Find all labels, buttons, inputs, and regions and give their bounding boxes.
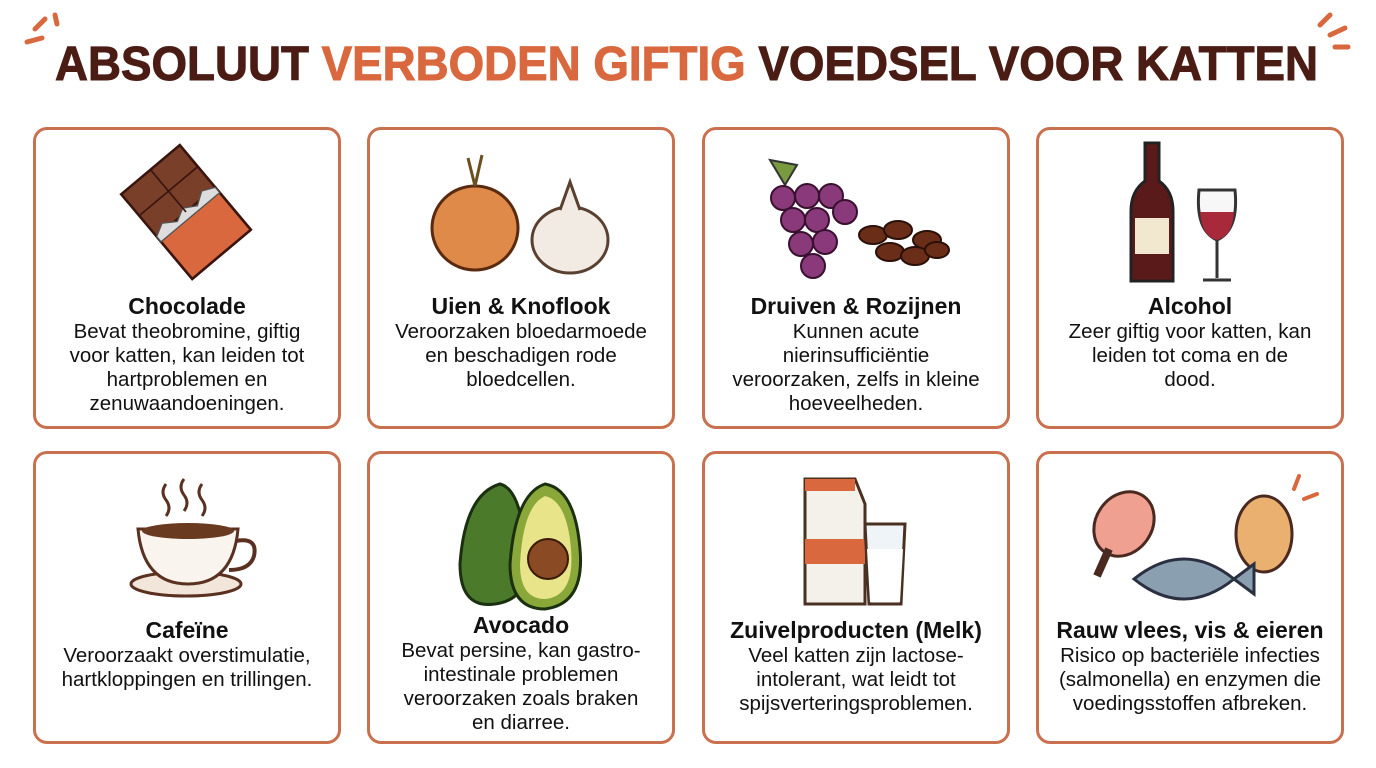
text: uien: bloedcellen. <box>466 368 576 391</box>
text: chocolade: zenuwaandoeningen. <box>90 392 284 415</box>
text: uien <box>395 293 647 391</box>
text: rauw: voedingsstoffen afbreken. <box>1073 692 1307 715</box>
text: alcohol: leiden tot coma en de <box>1092 344 1288 367</box>
text: cafeine: hartkloppingen en trillingen. <box>62 668 312 691</box>
text: uien: en beschadigen rode <box>425 344 617 367</box>
panel: zuivel <box>702 451 1010 744</box>
icon: avocado <box>458 482 582 610</box>
text: chocolade <box>70 293 304 415</box>
text: druiven: Druiven & Rozijnen <box>751 293 961 319</box>
text: chocolade: voor katten, kan leiden tot <box>70 344 304 367</box>
text: cafeine: Veroorzaakt overstimulatie, <box>63 644 311 667</box>
text: druiven: Kunnen acute <box>793 320 919 343</box>
text: rauw: Risico op bacteriële infecties <box>1060 644 1320 667</box>
text: cafeine: Cafeïne <box>145 617 229 643</box>
text: avocado: Bevat persine, kan gastro- <box>401 639 641 662</box>
icon: meat fish egg <box>1092 474 1320 600</box>
text: alcohol: Zeer giftig voor katten, kan <box>1069 320 1311 343</box>
panel: rauw <box>1036 451 1344 744</box>
text: rauw: (salmonella) en enzymen die <box>1059 668 1321 691</box>
text: zuivel: spijsverteringsproblemen. <box>739 692 973 715</box>
panel: avocado <box>367 451 675 744</box>
icon: wine bottle and glass <box>1130 142 1238 282</box>
text: zuivel: intolerant, wat leidt tot <box>756 668 956 691</box>
text: rauw <box>1056 617 1324 715</box>
text: chocolade: Chocolade <box>128 293 246 319</box>
text: chocolade: Bevat theobromine, giftig <box>74 320 300 343</box>
text: avocado <box>401 612 641 734</box>
panel: druiven <box>702 127 1010 429</box>
icon: chocolate bar <box>119 143 253 281</box>
text: alcohol: Alcohol <box>1148 293 1232 319</box>
text: alcohol <box>1069 293 1311 391</box>
text: avocado: veroorzaken zoals braken <box>404 687 638 710</box>
text: chocolade: hartproblemen en <box>107 368 267 391</box>
icon: onion and garlic <box>430 154 610 274</box>
text: uien: Veroorzaken bloedarmoede <box>395 320 647 343</box>
panel: alcohol <box>1036 127 1344 429</box>
text: cafeine <box>62 617 312 691</box>
icon: milk carton and glass <box>804 478 907 606</box>
text: alcohol: dood. <box>1164 368 1216 391</box>
icon: coffee cup <box>130 478 257 598</box>
panel: chocolade <box>33 127 341 429</box>
text: uien: Uien & Knoflook <box>432 293 610 319</box>
panel: cafeine <box>33 451 341 744</box>
text: avocado: en diarree. <box>472 711 570 734</box>
text: druiven: veroorzaken, zelfs in kleine <box>732 368 980 391</box>
text: avocado: intestinale problemen <box>424 663 618 686</box>
text: zuivel <box>730 617 982 715</box>
text: druiven <box>732 293 980 415</box>
text: zuivel: Veel katten zijn lactose- <box>748 644 964 667</box>
text: druiven: hoeveelheden. <box>789 392 923 415</box>
title text: ABSOLUUT VERBODEN GIFTIG VOEDSEL VOOR KATTEN <box>55 38 1318 91</box>
panel: uien <box>367 127 675 429</box>
text: zuivel: Zuivelproducten (Melk) <box>730 617 982 643</box>
text: avocado: Avocado <box>473 612 569 638</box>
title <box>24 12 1350 91</box>
text: druiven: nierinsufficiëntie <box>783 344 929 367</box>
decorative sparks <box>27 15 1348 47</box>
text: rauw: Rauw vlees, vis & eieren <box>1056 617 1324 643</box>
icon: grapes and raisins <box>768 158 950 279</box>
